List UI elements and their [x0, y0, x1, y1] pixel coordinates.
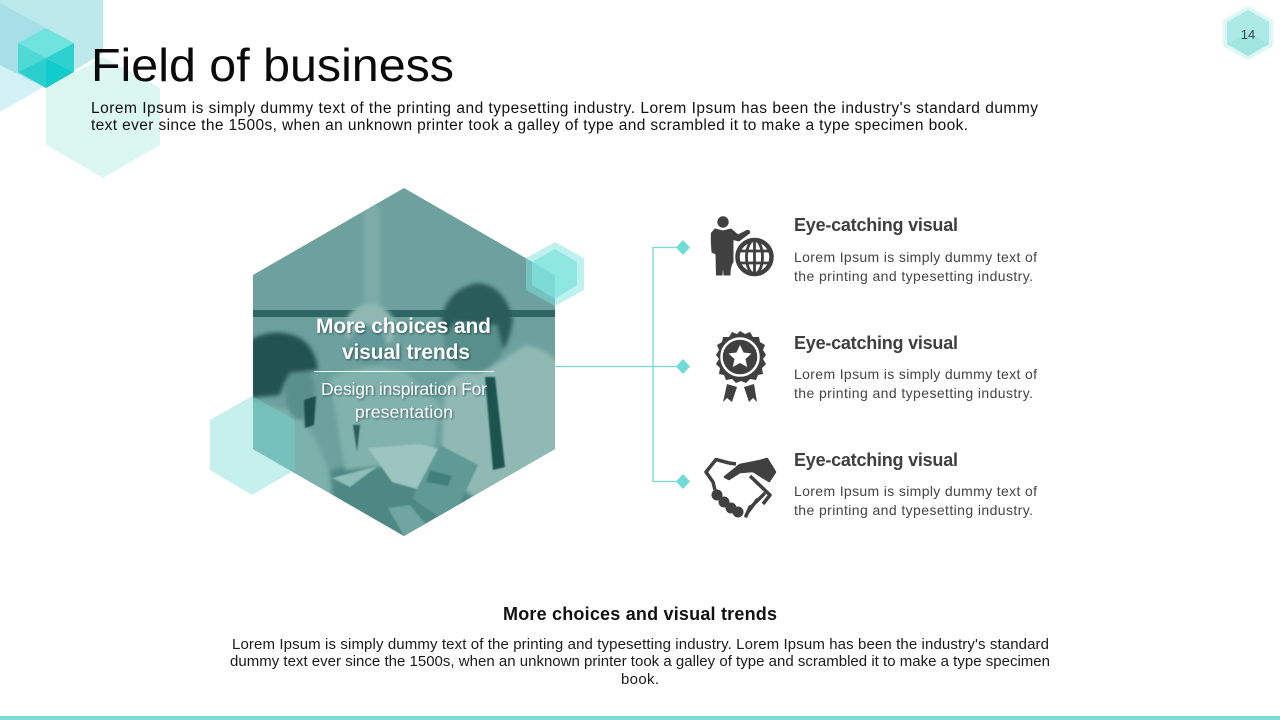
photo: left man [253, 330, 334, 496]
panel: hexagon photo [250, 188, 560, 540]
heading and text 2 [794, 333, 1037, 401]
photo caption: visual trends [342, 341, 470, 364]
heading and text 2: Lorem Ipsum is simply dummy text of [794, 366, 1037, 382]
photo caption: Design inspiration For [321, 379, 487, 399]
decoration: small hexagon lower left of photo [210, 396, 295, 495]
heading and text 2: Eye-catching visual [794, 333, 958, 353]
photo: table [295, 445, 555, 540]
diamond marker 3 [676, 474, 690, 489]
footer heading: More choices and visual trends [503, 604, 777, 624]
bottom accent bar [0, 716, 1280, 720]
photo caption: presentation [355, 402, 453, 422]
intro text block: Lorem Ipsum is simply dummy text of the printing and typesetting industry. Lorem Ipsum has been the industry's standard dummy [91, 100, 1038, 117]
title: Field of business [91, 39, 454, 91]
decoration: small hexagon upper right of photo [526, 242, 584, 306]
diamond marker 1 [676, 240, 690, 255]
footer text block: Lorem Ipsum is simply dummy text of the printing and typesetting industry. Lorem Ipsum has been the industry's standard [232, 636, 1049, 653]
icon: award rosette [716, 331, 766, 402]
icon: presenter with globe [711, 216, 772, 275]
photo: crisp details [304, 377, 505, 536]
photo caption: More choices and [316, 315, 491, 338]
intro text block [91, 100, 1038, 134]
photo: centre woman [330, 304, 440, 470]
intro text block: text ever since the 1500s, when an unknown printer took a galley of type and scrambled it to make a type specimen book. [91, 117, 968, 134]
icon: handshake [706, 459, 775, 518]
heading and text 3 [794, 450, 1037, 518]
footer text block: dummy text ever since the 1500s, when an unknown printer took a galley of type and scrambled it to make a type specimen [230, 653, 1050, 670]
heading and text 3: Lorem Ipsum is simply dummy text of [794, 483, 1037, 499]
page number badge [1223, 6, 1273, 60]
decoration: top-left hexagon cluster [0, 0, 160, 178]
heading and text 1 [794, 215, 1037, 284]
diamond marker 2 [676, 359, 690, 374]
connector lines [555, 248, 683, 482]
heading and text 1: Lorem Ipsum is simply dummy text of [794, 249, 1037, 265]
footer text block [230, 636, 1050, 688]
heading and text 3: the printing and typesetting industry. [794, 502, 1033, 518]
photo: right man [440, 283, 560, 500]
heading and text 2: the printing and typesetting industry. [794, 385, 1033, 401]
heading and text 3: Eye-catching visual [794, 450, 958, 470]
heading and text 1: the printing and typesetting industry. [794, 268, 1033, 284]
icon: teal cube [18, 28, 74, 88]
photo caption [314, 315, 494, 422]
page number badge: 14 [1241, 27, 1255, 42]
heading and text 1: Eye-catching visual [794, 215, 958, 235]
footer text block: book. [621, 671, 659, 688]
